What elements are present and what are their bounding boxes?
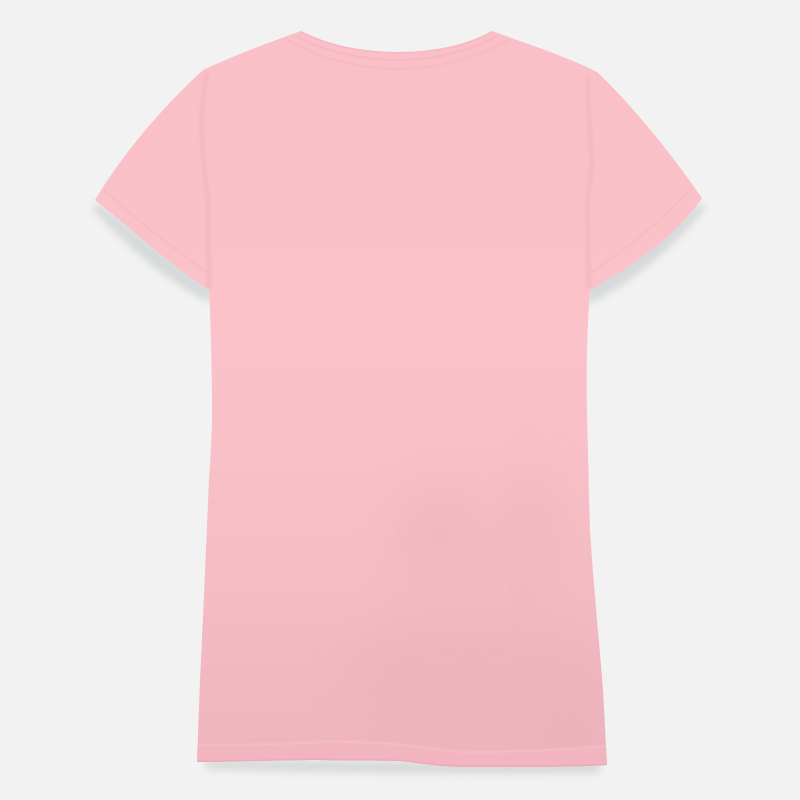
right sleeve seam [588, 157, 592, 286]
left sleeve hem [104, 190, 206, 272]
left sleeve seam [208, 204, 210, 286]
shirt body [95, 31, 702, 770]
bottom edge shading [197, 760, 607, 767]
right sleeve hem [592, 188, 692, 272]
fabric shading [350, 460, 620, 770]
hem band [197, 748, 607, 766]
bottom hem stitch [377, 742, 604, 752]
t-shirt illustration [93, 31, 706, 776]
collar rib [301, 31, 492, 59]
shirt shadow [92, 203, 706, 774]
